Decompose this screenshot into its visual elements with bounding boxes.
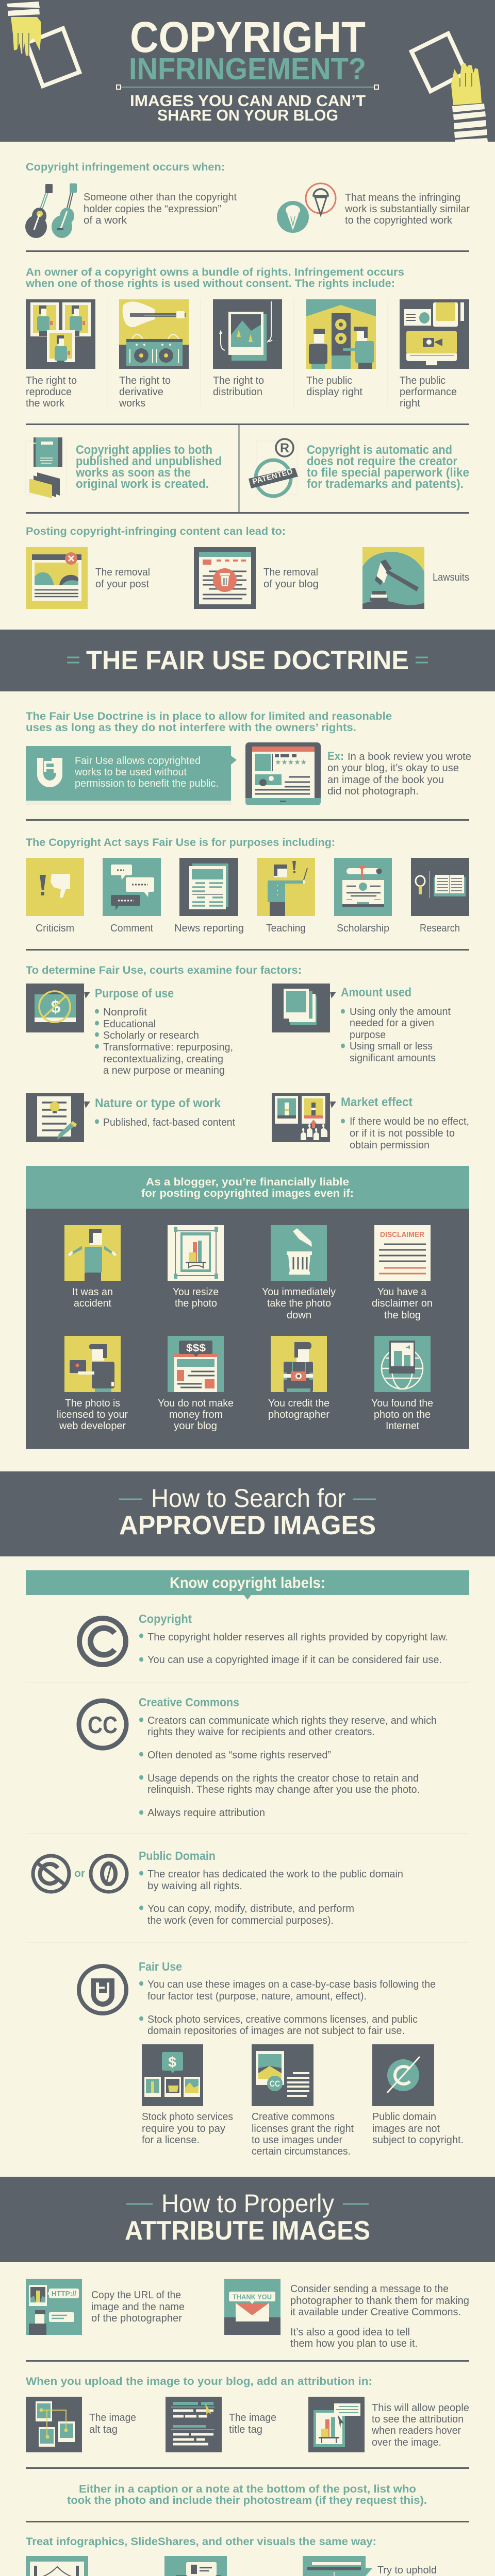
label: public domain: You can copy, modify, distribute, and perform	[147, 1903, 354, 1914]
text: consider sending a message: It’s also a good idea to tell	[290, 2327, 410, 2338]
captions: fair use panels: Stock photo services	[142, 2111, 233, 2123]
text: uphold image quality: Try to uphold	[377, 2565, 437, 2576]
labels: liability row two: photo on the	[374, 1409, 431, 1420]
label: public domain: by waiving all rights.	[147, 1880, 242, 1892]
text: example: an image of the book you	[327, 774, 444, 786]
text: title tag: title tag	[229, 2424, 262, 2435]
icon: book and folder	[26, 437, 67, 498]
heading: bundle of rights: An owner of a copyright owns a bundle of rights. Infringement occurs	[26, 266, 404, 278]
labels: liability row two: The photo is	[65, 1398, 120, 1409]
panel: hover icon	[308, 2397, 365, 2452]
captions: fair use panels: for a license.	[142, 2134, 200, 2146]
text: copyright is automatic: does not require the creator	[307, 454, 457, 468]
factor: amount used	[341, 986, 451, 1064]
text: performance: performance	[400, 386, 457, 398]
panel: lawsuits gavel icon	[362, 547, 424, 609]
text: performance: right	[400, 398, 420, 409]
panel: financially liable	[26, 1166, 469, 1449]
captions: fair use panels: images are not	[372, 2123, 440, 2134]
heading: copyright act purposes: The Copyright Act says Fair Use is for purposes including:	[26, 837, 335, 849]
icon: copyright symbol	[79, 1618, 126, 1665]
icon: left hand with striped cuff	[7, 2, 41, 56]
text: example: Ex:	[327, 750, 344, 762]
captions: fair use panels: certain circumstances.	[252, 2146, 351, 2157]
title: COPYRIGHT	[130, 13, 366, 61]
text: copyright is automatic: for trademarks and patents).	[307, 477, 464, 491]
text: performance: The public	[400, 375, 446, 386]
text: performance	[400, 375, 457, 409]
panel: purpose of use icon	[26, 984, 90, 1032]
banner: approved images: How to Search for	[151, 1484, 345, 1513]
text: substantially similar: That means the infringing	[345, 192, 460, 204]
text: removal of blog	[263, 567, 319, 590]
panel: thank you icon: THANK YOU	[233, 2293, 272, 2301]
icon: money speech bubble page: $$$	[186, 1343, 206, 1354]
banner: approved images	[0, 1471, 495, 1556]
text: example	[327, 750, 471, 797]
factor: amount used: Using only the amount	[350, 1006, 451, 1018]
text: derivative: derivative	[119, 386, 163, 398]
heading: financially liable: for posting copyrighted images even if:	[141, 1188, 354, 1199]
text: title tag	[229, 2412, 276, 2435]
panel: purpose of use icon: $	[51, 997, 61, 1017]
text: reproduce: the work	[26, 398, 65, 409]
text: consider sending a message: photographer to thank them for making	[290, 2295, 469, 2307]
icon: photo on the internet globe	[374, 1336, 431, 1392]
heading: treat infographics: Treat infographics, SlideShares, and other visuals the same way:	[26, 2536, 376, 2548]
header banner	[0, 0, 495, 142]
panel: teaching	[257, 858, 315, 916]
text: someone other: Someone other than the copyright	[84, 192, 237, 203]
text: copyright applies	[75, 443, 222, 491]
panel: public performance	[400, 299, 469, 369]
text: display: display right	[306, 386, 362, 398]
text: removal of blog: The removal	[263, 567, 318, 578]
panel: copy url icon	[26, 2279, 82, 2335]
labels: liability row two: web developer	[59, 1420, 126, 1432]
text: substantially similar: work is substantially similar	[344, 204, 470, 215]
panel: news reporting	[179, 858, 238, 916]
labels: liability row two: your blog	[174, 1420, 217, 1432]
icon: accident person	[64, 1225, 121, 1281]
factor: amount used: significant amounts	[350, 1053, 436, 1064]
panel: include a link icon	[26, 2556, 88, 2576]
captions: fair use panels: licenses grant the right	[252, 2123, 354, 2134]
captions: fair use panels: subject to copyright.	[372, 2134, 464, 2146]
factor: amount used: Using small or less	[350, 1041, 433, 1052]
icon: fair use monogram	[37, 758, 62, 787]
icon: taking photo down	[271, 1225, 327, 1281]
text: copyright is automatic: to file special paperwork (like	[307, 466, 469, 480]
factor: purpose of use: recontextualizing, creating	[103, 1054, 223, 1065]
text: copyright is automatic	[307, 443, 469, 491]
banner: attribute images: How to Properly	[161, 2189, 334, 2218]
label: creative commons: Creators can communicate which rights they reserve, and which	[147, 1715, 437, 1726]
purpose labels	[36, 923, 460, 934]
text: substantially similar: to the copyrighted work	[345, 215, 453, 226]
text: copyright is automatic: Copyright is automatic and	[307, 443, 452, 457]
label: fair use: Stock photo services, creative commons licenses, and public	[147, 2014, 418, 2025]
heading: financially liable: As a blogger, you’re financially liable	[146, 1176, 349, 1188]
heading: fair use intro: The Fair Use Doctrine is in place to allow for limited and reasonable	[26, 710, 392, 722]
icon: tablet book review: ★★★★★	[275, 758, 307, 766]
label: fair use: Fair Use	[139, 1960, 182, 1973]
panel: person's name icon	[164, 2556, 227, 2576]
labels: liability row one: the blog	[384, 1310, 421, 1321]
banner: know copyright labels: Know copyright labels:	[170, 1574, 325, 1591]
label: creative commons: Often denoted as “some rights reserved”	[147, 1750, 331, 1761]
panel: alt tag icon	[26, 2397, 82, 2452]
label: creative commons: Always require attribution	[147, 1807, 265, 1819]
icon: public domain symbols	[33, 1856, 127, 1892]
panel: right to derivative works	[119, 299, 189, 369]
captions: fair use panels: Creative commons	[252, 2111, 335, 2123]
labels: liability row one: You resize	[173, 1286, 219, 1298]
subtitle: SHARE ON YOUR BLOG	[157, 106, 338, 124]
factor: purpose of use	[95, 987, 233, 1076]
callout: fair use allows: works to be used without	[74, 767, 187, 778]
panel: right to distribution	[213, 299, 282, 369]
panel: nature of work icon	[26, 1093, 90, 1142]
banner: attribute images	[0, 2177, 495, 2262]
panel: research	[411, 858, 469, 916]
panel: public domain icon	[372, 2044, 434, 2106]
text: reproduce: reproduce	[26, 386, 72, 398]
text: consider sending a message: Consider sending a message to the	[290, 2283, 449, 2295]
captions: fair use panels: Public domain	[372, 2111, 436, 2123]
icon: photographer	[271, 1336, 327, 1392]
factor: market effect: Market effect	[341, 1095, 412, 1109]
panel: creative commons icon	[252, 2044, 314, 2106]
panel: comment	[103, 858, 161, 916]
factor: market effect: or if it is not possible to	[350, 1128, 455, 1139]
panel: scholarship	[334, 858, 392, 916]
panel: removal of blog icon	[194, 547, 256, 609]
purpose labels: Comment	[110, 923, 153, 934]
label: creative commons: relinquish. These rights may change after you use the photo.	[147, 1784, 420, 1795]
labels: liability row one: disclaimer on	[372, 1298, 433, 1309]
text: reproduce	[26, 375, 77, 409]
text: removal of post: The removal	[95, 567, 150, 578]
labels: liability row one: the photo	[175, 1298, 217, 1309]
callout: fair use allows: Fair Use allows copyrighted	[75, 755, 201, 767]
purpose labels: Teaching	[266, 923, 306, 934]
heading: either in a caption: took the photo and include their photostream (if they request this).	[67, 2495, 427, 2506]
label: creative commons	[139, 1696, 437, 1819]
icon: two guitars	[25, 183, 77, 238]
icon: fair use symbol	[79, 1966, 126, 2013]
icon: two ice creams	[277, 183, 336, 233]
text: removal of post: of your post	[95, 579, 149, 590]
text: consider sending a message	[290, 2283, 469, 2349]
panel: criticism	[26, 858, 84, 916]
text: someone other: holder copies the “expression”	[84, 204, 221, 215]
labels: liability row two: You credit the	[268, 1398, 329, 1409]
labels: liability row two: photographer	[268, 1409, 329, 1420]
icon: registered and patented seal: PATENTED	[252, 467, 293, 486]
banner: know copyright labels	[26, 1570, 469, 1600]
labels: liability row two: money from	[169, 1409, 223, 1420]
text: distribution: The right to	[213, 375, 264, 386]
heading: four factors: To determine Fair Use, courts examine four factors:	[26, 964, 302, 976]
factor: nature or type	[95, 1096, 235, 1128]
text: removal of post	[95, 567, 150, 590]
purpose labels: News reporting	[174, 923, 244, 934]
text: copyright applies: original work is created.	[76, 477, 209, 491]
icon: public domain symbols: or	[74, 1868, 85, 1879]
factor: market effect: obtain permission	[350, 1140, 430, 1151]
icon: registered and patented seal: R	[280, 441, 289, 455]
banner: attribute images: ATTRIBUTE IMAGES	[125, 2216, 370, 2246]
label: fair use: You can use these images on a case-by-case basis following the	[147, 1979, 436, 1990]
label: fair use: four factor test (purpose, nature, amount, effect).	[147, 1991, 367, 2002]
banner: approved images: APPROVED IMAGES	[119, 1511, 376, 1540]
label: copyright: You can use a copyrighted image if it can be considered fair use.	[147, 1654, 442, 1666]
panel: title tag icon	[166, 2397, 222, 2452]
label: fair use	[139, 1960, 436, 2037]
label: creative commons: Usage depends on the rights the creator chose to retain and	[147, 1773, 419, 1784]
panel: stock photo icon: $	[168, 2054, 176, 2070]
subtitle	[130, 92, 366, 124]
banner: fair use doctrine: THE FAIR USE DOCTRINE	[86, 646, 409, 675]
panel: public display	[306, 299, 376, 369]
captions: fair use panels: require you to pay	[142, 2123, 225, 2134]
factor: market effect: If there would be no effect,	[350, 1116, 469, 1127]
text: copyright applies: Copyright applies to both	[76, 443, 212, 457]
heading: fair use intro: uses as long as they do not interfere with the owners’ rights.	[26, 722, 356, 734]
labels: liability row one: accident	[74, 1298, 111, 1309]
factor: purpose of use: Transformative: repurposing,	[103, 1042, 233, 1053]
factor: nature or type: Nature or type of work	[95, 1096, 221, 1110]
labels: liability row one: It was an	[72, 1286, 113, 1298]
panel: amount used icon	[272, 984, 336, 1032]
heading: bundle of rights: when one of those rights is used without consent. The rights include:	[25, 278, 395, 290]
label: public domain: The creator has dedicated the work to the public domain	[147, 1869, 403, 1880]
factor: nature or type: Published, fact-based content	[103, 1117, 235, 1128]
text: copy the url	[91, 2290, 185, 2324]
text: copyright applies: published and unpublished	[76, 454, 222, 468]
text: title tag: The image	[229, 2412, 276, 2424]
icon: disclaimer document: DISCLAIMER	[380, 1230, 424, 1239]
label: creative commons: rights they waive for recipients and other creators.	[147, 1726, 375, 1738]
factor: purpose of use: Purpose of use	[95, 987, 174, 1001]
icon: money speech bubble page	[168, 1336, 224, 1392]
icon: creative commons symbol	[79, 1701, 126, 1748]
heading: either in a caption: Either in a caption or a note at the bottom of the post, list who	[79, 2483, 416, 2495]
text: distribution: distribution	[213, 386, 262, 398]
heading: fair use intro	[26, 710, 392, 734]
text: copy the url: image and the name	[91, 2301, 185, 2313]
panel: creative commons icon: CC	[270, 2079, 280, 2089]
text: alt tag	[89, 2412, 136, 2435]
panel: image quality icon	[303, 2556, 372, 2576]
label: copyright: The copyright holder reserves all rights provided by copyright law.	[147, 1632, 448, 1643]
text: derivative	[119, 375, 171, 409]
factor: purpose of use: Scholarly or research	[103, 1030, 199, 1041]
labels: liability row one	[72, 1286, 433, 1321]
captions: fair use panels	[142, 2111, 464, 2157]
panel: copy url icon: HTTP://	[52, 2290, 77, 2298]
panel: market effect icon	[272, 1093, 336, 1142]
label: copyright: Copyright	[139, 1612, 192, 1625]
panel: removal of post icon	[26, 547, 88, 609]
label: copyright	[139, 1612, 448, 1666]
label: public domain: Public Domain	[139, 1849, 216, 1862]
text: example: on your blog, it’s okay to use	[327, 762, 459, 774]
purpose labels: Research	[420, 923, 460, 934]
heading: bundle of rights	[25, 266, 404, 290]
icon: creative commons symbol: CC	[88, 1711, 118, 1738]
subtitle: IMAGES YOU CAN AND CAN’T	[130, 92, 366, 110]
icon: registered and patented seal	[249, 439, 298, 496]
labels: liability row two	[57, 1398, 433, 1432]
text: consider sending a message: them how you plan to use it.	[290, 2338, 418, 2349]
text: hover: when readers hover	[371, 2425, 461, 2436]
heading: add an attribution: When you upload the image to your blog, add an attribution in:	[26, 2376, 372, 2387]
text: hover	[371, 2402, 469, 2448]
labels: liability row two: You do not make	[158, 1398, 234, 1409]
text: derivative: works	[119, 398, 145, 409]
text: substantially similar	[344, 192, 470, 226]
callout: fair use allows: permission to benefit the public.	[75, 778, 219, 789]
heading: financially liable	[141, 1176, 354, 1199]
text: alt tag: The image	[89, 2412, 136, 2424]
purpose labels: Criticism	[36, 923, 74, 934]
heading: infringement occurs when: Copyright infringement occurs when:	[26, 161, 225, 173]
title	[129, 13, 366, 86]
icon: tablet book review	[245, 742, 321, 805]
labels: liability row one: down	[287, 1310, 311, 1321]
text: distribution	[213, 375, 264, 398]
label: public domain: the work (even for commercial purposes).	[147, 1915, 334, 1926]
panel: right to reproduce	[26, 299, 95, 369]
icon: disclaimer document	[374, 1225, 431, 1281]
text: display: The public	[306, 375, 352, 386]
factor: amount used: needed for a given	[350, 1018, 434, 1029]
text: consider sending a message: it available under Creative Commons.	[290, 2307, 461, 2318]
text: copy the url: Copy the URL of the	[91, 2290, 181, 2301]
labels: liability row two: licensed to your	[57, 1409, 128, 1420]
labels: liability row one: take the photo	[267, 1298, 331, 1309]
text: removal of blog: of your blog	[263, 579, 319, 590]
icon: right hand with striped cuff	[451, 63, 488, 142]
text: example: did not photograph.	[327, 786, 419, 797]
factor: market effect	[341, 1095, 469, 1151]
purpose labels: Scholarship	[337, 923, 389, 934]
text: someone other	[84, 192, 237, 226]
text: hover: to see the attribution	[372, 2414, 464, 2425]
factor: purpose of use: Nonprofit	[103, 1007, 147, 1018]
label: creative commons: Creative Commons	[139, 1696, 239, 1709]
icon: left photo frame	[27, 28, 79, 86]
text: copyright applies: works as soon as the	[75, 466, 191, 480]
title: INFRINGEMENT?	[129, 52, 366, 86]
panel: stock photo icon	[142, 2044, 203, 2106]
heading: posting can lead to: Posting copyright-infringing content can lead to:	[26, 526, 286, 537]
text: someone other: of a work	[84, 215, 127, 226]
captions: fair use panels: to use images under	[252, 2134, 342, 2146]
text: hover: over the image.	[372, 2437, 441, 2448]
heading: either in a caption	[67, 2483, 427, 2506]
text: hover: This will allow people	[372, 2402, 469, 2414]
factor: purpose of use: Educational	[103, 1019, 156, 1030]
text: example: In a book review you wrote	[348, 751, 471, 762]
factor: purpose of use: a new purpose or meaning	[103, 1065, 225, 1076]
text: copy the url: of the photographer	[91, 2313, 182, 2324]
text: reproduce: The right to	[26, 375, 77, 386]
banner: fair use doctrine	[0, 630, 495, 691]
icon: resized photo	[168, 1225, 224, 1281]
label: public domain	[139, 1849, 403, 1926]
callout: fair use allows	[26, 746, 237, 805]
labels: liability row one: You have a	[377, 1286, 427, 1298]
labels: liability row two: Internet	[386, 1420, 419, 1432]
text: lawsuits: Lawsuits	[433, 572, 469, 583]
label: fair use: domain repositories of images are not subject to fair use.	[147, 2025, 405, 2037]
title divider	[117, 85, 378, 89]
panel: thank you icon	[224, 2279, 280, 2335]
icon: right photo frame	[411, 33, 466, 91]
text: display	[306, 375, 362, 398]
icon: web developer with laptop	[64, 1336, 121, 1392]
text: alt tag: alt tag	[89, 2424, 118, 2435]
factor: amount used: purpose	[350, 1029, 386, 1041]
labels: liability row two: You found the	[371, 1398, 433, 1409]
text: derivative: The right to	[119, 375, 171, 386]
factor: amount used: Amount used	[341, 986, 411, 999]
labels: liability row one: You immediately	[262, 1286, 336, 1298]
